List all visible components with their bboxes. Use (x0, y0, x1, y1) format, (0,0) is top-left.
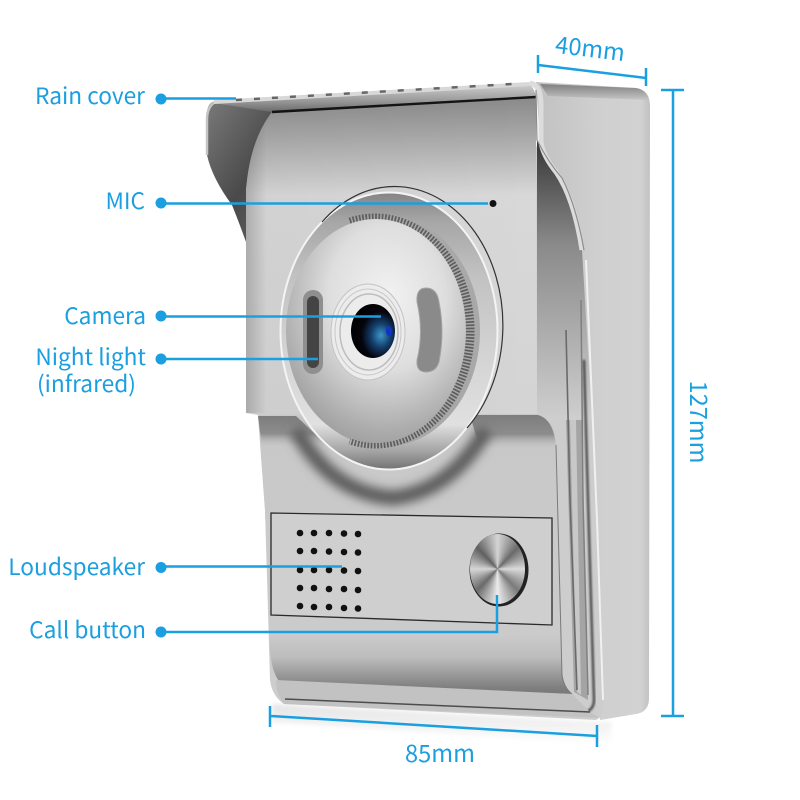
dimension: width 85mm (270, 706, 597, 769)
speaker panel (271, 513, 552, 625)
device reflection (272, 704, 612, 745)
rain cover right rim (530, 83, 582, 250)
upper face plate (246, 97, 537, 414)
callout: MIC (105, 183, 496, 216)
recess shadow right (470, 415, 556, 450)
bottom groove (285, 699, 590, 712)
right rail light strip (570, 420, 581, 695)
rain cover underside (214, 84, 536, 112)
callout: Loudspeaker: Loudspeaker (8, 549, 145, 582)
lower plate (258, 414, 572, 694)
rain cover under shadow (272, 97, 536, 112)
call button (470, 534, 528, 606)
callout: Rain cover (35, 78, 236, 111)
rain cover left rim (207, 101, 218, 155)
callout: Night light (infrared): Night light (35, 339, 146, 372)
recess shadow around camera (296, 430, 486, 498)
lens (351, 304, 395, 358)
face left shading (246, 97, 537, 414)
callout: Night light (infrared) (35, 339, 318, 399)
dimension: width 85mm: 85mm (405, 735, 475, 769)
lens ring (331, 284, 405, 380)
callout: Camera (64, 298, 381, 331)
side panel (536, 82, 650, 720)
dimension: depth 40mm: 40mm (554, 26, 627, 68)
dimension: depth 40mm (538, 26, 646, 86)
lower plate right edge (556, 445, 572, 694)
callout: Camera: Camera (64, 298, 146, 331)
callout: Loudspeaker (8, 549, 342, 582)
callout: MIC: MIC (105, 183, 145, 216)
rain cover inner (207, 100, 300, 242)
rain cover vents (236, 84, 512, 100)
callout: Call button (29, 595, 497, 645)
dome (286, 219, 466, 443)
side panel top band (540, 84, 649, 100)
callout: Call button: Call button (29, 612, 146, 645)
camera bezel (280, 192, 498, 470)
body below hood (246, 120, 603, 720)
dimension: height 127mm (661, 90, 717, 716)
recess shadow left (258, 416, 330, 448)
hood right gap (537, 140, 592, 420)
right rail shaded strip (566, 420, 588, 700)
callout: Night light (infrared): (infrared) (37, 366, 136, 399)
speaker holes (297, 530, 361, 612)
right rail grooves (566, 260, 603, 713)
night light right (417, 288, 442, 372)
rain cover right rim shade (536, 90, 584, 250)
dimension: height 127mm: 127mm (683, 381, 717, 463)
icon: door intercom device (207, 82, 650, 745)
bottom lip (276, 680, 600, 718)
knurled ring (288, 215, 480, 447)
callout: Rain cover: Rain cover (35, 78, 145, 111)
rain cover top rim (214, 84, 530, 102)
night light left (303, 290, 323, 374)
